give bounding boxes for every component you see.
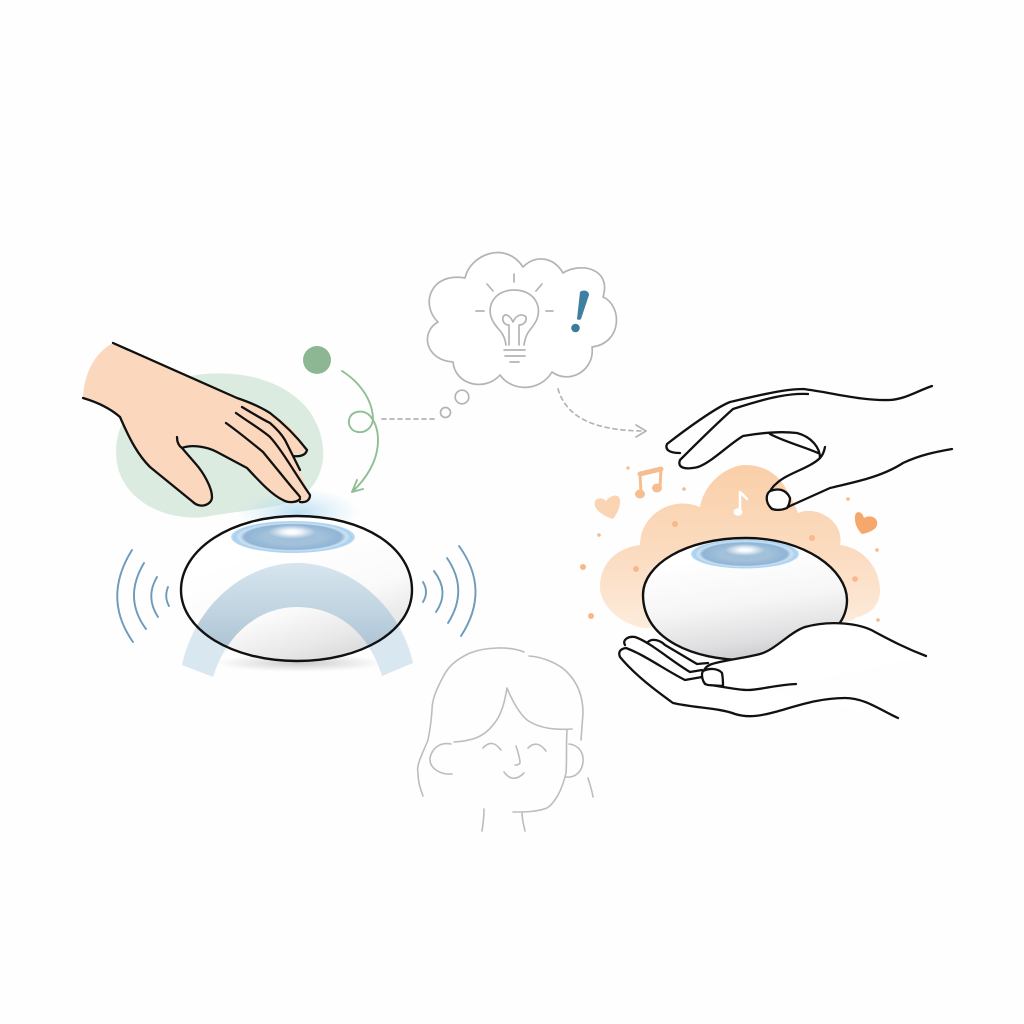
heart left xyxy=(595,496,620,519)
panel: cradling hands xyxy=(580,386,952,718)
eyes xyxy=(483,743,546,751)
thought dots xyxy=(455,390,469,404)
cloud outline xyxy=(427,253,616,387)
lower hand xyxy=(619,623,926,718)
green dot xyxy=(303,346,331,374)
white music note xyxy=(734,492,747,516)
face line drawing xyxy=(418,648,593,831)
ears xyxy=(430,744,583,777)
exclamation mark xyxy=(571,291,589,332)
green looping arrow xyxy=(342,371,378,492)
hair xyxy=(418,648,583,796)
glowing lens right xyxy=(691,540,799,568)
dashed arrow right xyxy=(558,389,646,431)
arrow head xyxy=(636,425,646,437)
illustration xyxy=(82,252,954,832)
face contour xyxy=(513,730,567,812)
sound waves right xyxy=(423,546,476,636)
sound waves left xyxy=(117,550,169,642)
smart device left xyxy=(181,516,412,661)
heart right xyxy=(855,512,877,534)
orange cloud xyxy=(600,465,880,628)
hand pressing xyxy=(83,343,310,506)
touch glow xyxy=(236,488,360,536)
music note orange xyxy=(635,469,662,498)
dashed connector left xyxy=(382,418,434,420)
pale vibration band xyxy=(182,563,413,677)
blue vibration band on device xyxy=(198,563,398,646)
panel: press gesture xyxy=(83,343,476,677)
glowing lens xyxy=(231,521,355,553)
thumb nail xyxy=(767,489,790,510)
orange sparkles xyxy=(580,466,880,622)
upper hand xyxy=(666,386,952,510)
neck and shoulder xyxy=(482,778,593,831)
light bulb icon xyxy=(476,274,553,362)
thought bubble xyxy=(382,253,646,437)
lower thumb xyxy=(702,669,723,686)
nose xyxy=(515,746,520,765)
green blob behind hand xyxy=(116,373,323,518)
device outline xyxy=(181,516,412,661)
smile xyxy=(504,772,524,778)
device shadow xyxy=(215,654,385,672)
smart device right xyxy=(643,538,847,660)
